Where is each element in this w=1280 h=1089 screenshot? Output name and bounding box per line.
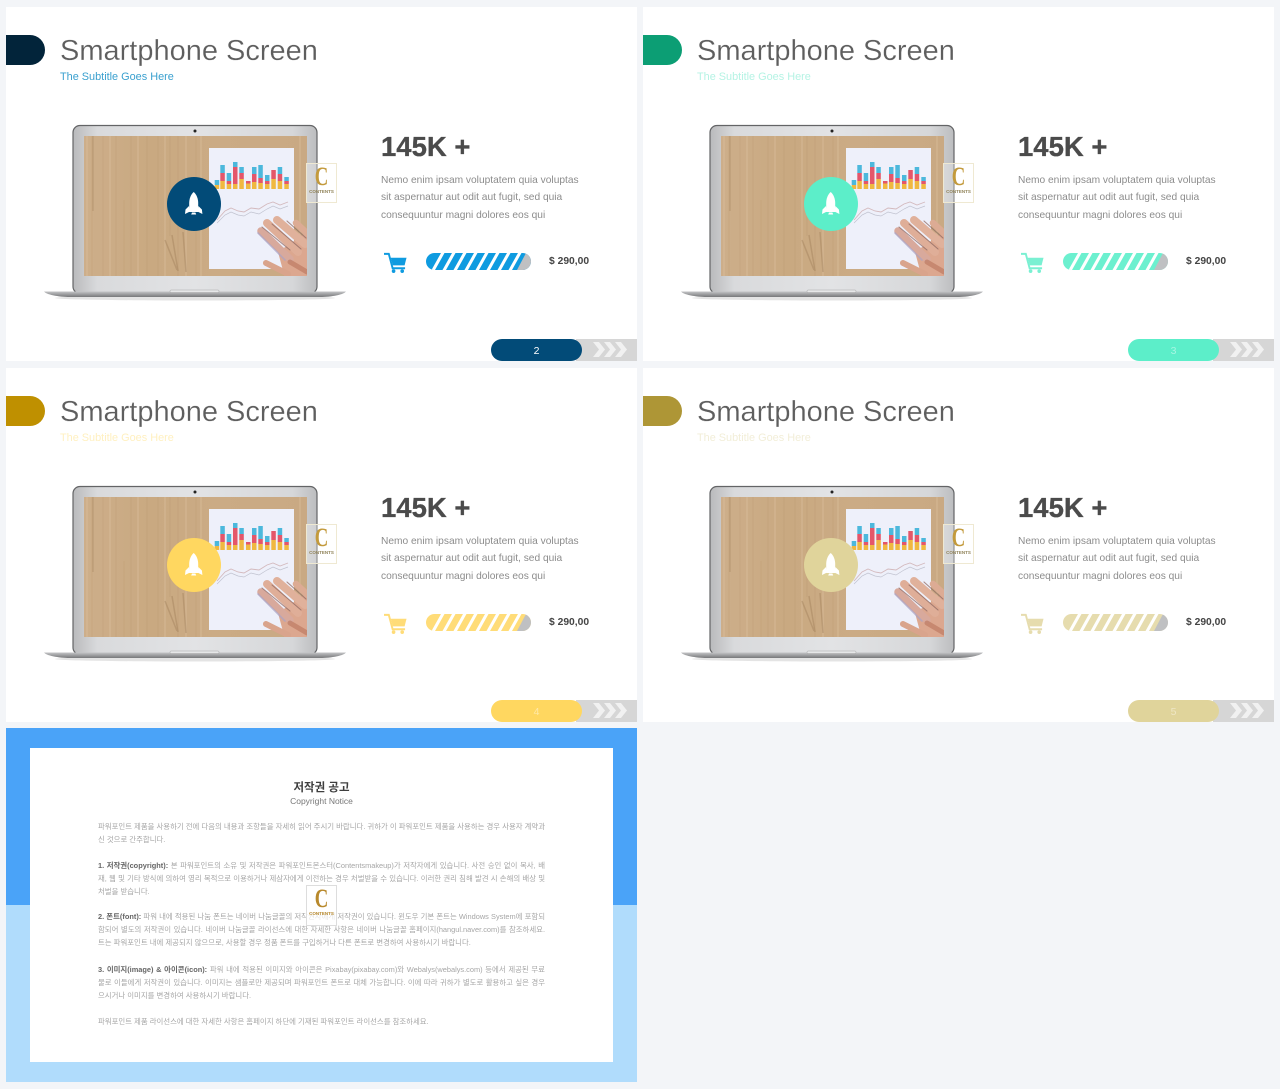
panel: slide 4 amber [6,368,637,722]
watermark logo: CONTENTS [946,550,971,555]
notice body text: 으시거나 이미지를 변경하여 사용하시기 바랍니다. [98,991,251,1000]
watermark logo: CONTENTS [309,911,334,916]
description: sit aspernatur aut odit aut fugit, sed quia [1018,553,1199,564]
price: $ 290,00 [1186,256,1226,267]
striped progress bar [426,253,531,270]
description: sit aspernatur aut odit aut fugit, sed quia [1018,192,1199,203]
page number pill: 5 [1171,706,1176,718]
striped progress bar [426,614,531,631]
subtitle: The Subtitle Goes Here [60,71,174,83]
laptop illustration [681,124,983,300]
description [1018,174,1216,220]
description: consequuntur magni dolores eos qui [381,570,545,582]
notice body text: 파워포인트 제품 라이선스에 대한 자세한 사항은 홈페이지 하단에 기재된 파워포인트 라이선스를 참조하세요. [98,1017,429,1026]
description: Nemo enim ipsam voluptatem quia voluptas [1018,174,1216,186]
panel: slide 5 khaki [643,368,1274,722]
watermark logo [943,524,974,564]
watermark logo [943,163,974,203]
page number pill [1128,700,1219,722]
description: consequuntur magni dolores eos qui [1018,210,1182,220]
panel: slide 2 navy [6,7,637,361]
laptop illustration [681,486,983,662]
page number pill: 4 [534,706,539,718]
description [381,174,579,220]
icon: rocket badge [167,538,221,592]
description: Nemo enim ipsam voluptatem quia voluptas [381,174,579,186]
description: Nemo enim ipsam voluptatem quia voluptas [381,536,579,546]
heading: Smartphone Screen [60,35,318,67]
page number pill [491,339,582,361]
icon: cart [1021,252,1044,273]
panel: slide 3 green [643,7,1274,361]
laptop illustration [44,124,346,300]
chevron strip [576,339,637,361]
tab marker [6,35,45,65]
notice subtitle: Copyright Notice [290,796,353,806]
notice body text [98,822,545,1026]
description: sit aspernatur aut odit aut fugit, sed quia [381,192,562,203]
watermark logo: CONTENTS [309,550,334,555]
watermark logo [306,524,337,564]
subtitle: The Subtitle Goes Here [697,432,811,444]
panel: copyright notice [6,728,637,1082]
watermark logo: CONTENTS [946,189,971,194]
icon: cart [1021,614,1044,634]
icon: rocket badge [804,177,858,231]
price: $ 290,00 [549,256,589,267]
subtitle: The Subtitle Goes Here [60,432,174,444]
description [1018,536,1216,582]
icon: cart [384,252,406,273]
watermark logo: CONTENTS [309,189,334,194]
tab marker [6,396,45,426]
stat number: 145K + [1018,492,1107,523]
description: Nemo enim ipsam voluptatem quia voluptas [1018,536,1216,546]
description: consequuntur magni dolores eos qui [1018,570,1182,582]
heading: Smartphone Screen [697,396,955,428]
stat number: 145K + [381,492,470,523]
stat number: 145K + [381,131,470,162]
page number pill: 2 [534,345,539,357]
description: consequuntur magni dolores eos qui [381,210,545,220]
notice body text: 처벌을 받습니다. [98,887,150,896]
watermark logo [306,885,337,926]
page number pill: 3 [1171,345,1176,357]
price: $ 290,00 [1186,617,1226,628]
notice body text: 신 것으로 간주합니다. [98,835,165,844]
heading: Smartphone Screen [60,396,318,428]
notice body text: 트는 파워포인트 내에 제공되지 않으므로, 사용할 경우 정품 폰트를 구입하거나 다른 폰트로 변경하여 사용하시기 바랍니다. [98,938,471,947]
notice title: 저작권 공고 [293,782,350,794]
chevron strip [576,700,637,722]
striped progress bar [1063,614,1168,631]
laptop illustration [44,486,346,662]
price: $ 290,00 [549,617,589,628]
tab marker [643,396,682,426]
icon: cart [384,614,406,634]
striped progress bar [1063,253,1168,270]
chevron strip [1213,339,1274,361]
description: sit aspernatur aut odit aut fugit, sed quia [381,553,562,564]
page number pill [1128,339,1219,361]
description [381,536,579,582]
icon: rocket badge [167,177,221,231]
page number pill [491,700,582,722]
tab marker [643,35,682,65]
notice sheet [30,748,613,1062]
subtitle: The Subtitle Goes Here [697,71,811,83]
chevron strip [1213,700,1274,722]
watermark logo [306,163,337,203]
heading: Smartphone Screen [697,35,955,67]
icon: rocket badge [804,538,858,592]
stat number: 145K + [1018,131,1107,162]
